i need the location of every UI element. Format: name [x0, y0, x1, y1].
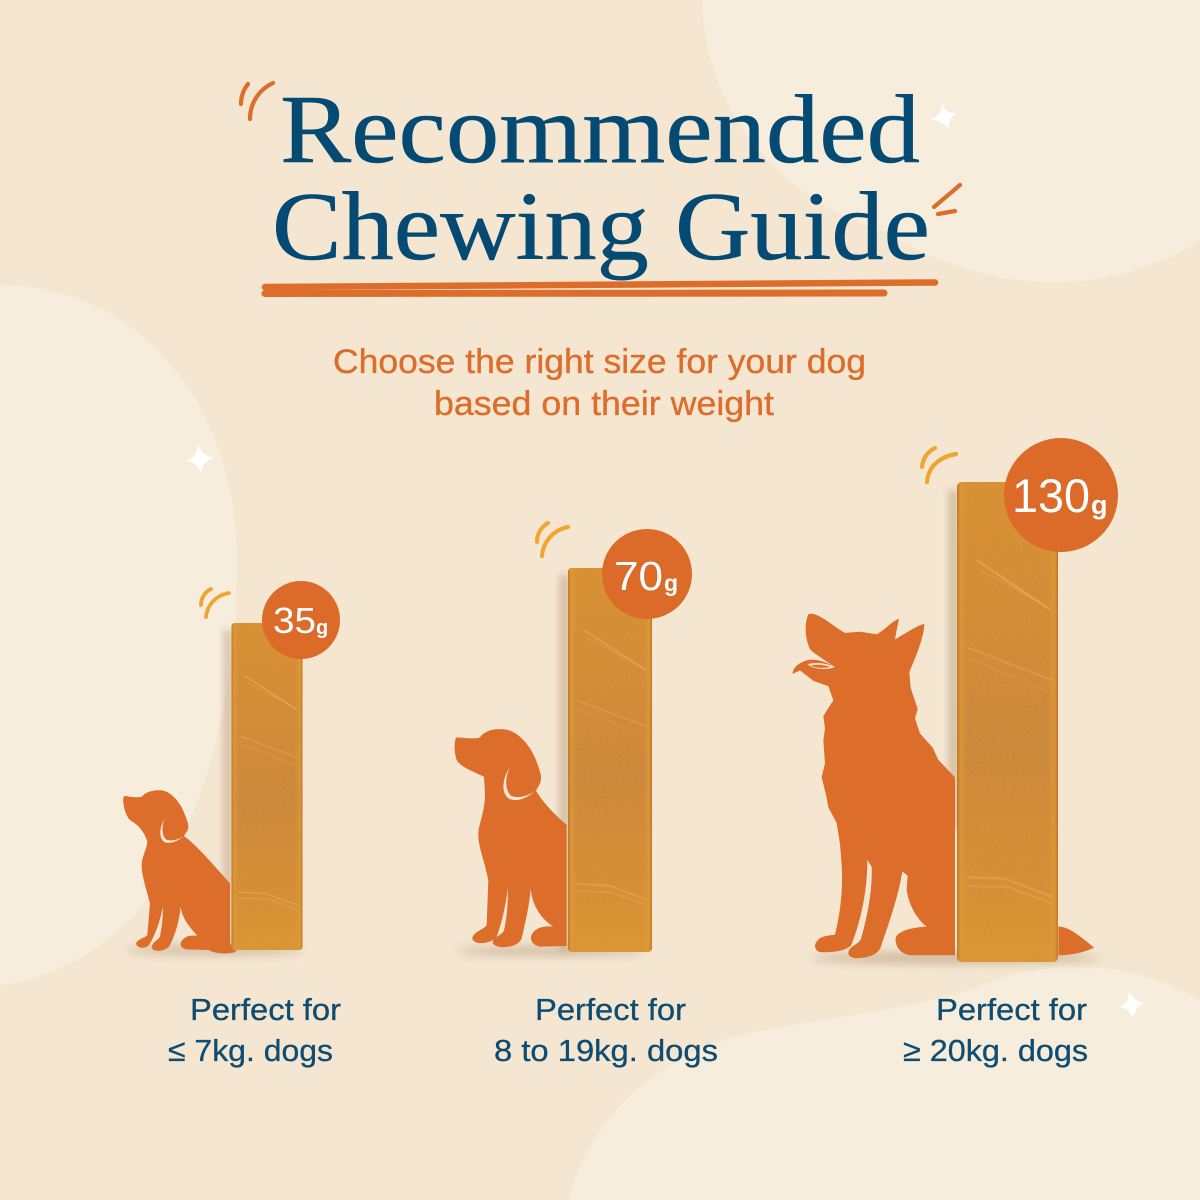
title — [272, 76, 930, 280]
weight badge 35g — [262, 581, 340, 659]
caption: small dog: ≤ 7kg. dogs — [168, 1033, 333, 1068]
weight badge 130g — [1004, 438, 1118, 552]
accent marks: title top left — [241, 83, 273, 119]
small dog silhouette — [123, 790, 237, 953]
ground shadow — [125, 946, 305, 954]
bar side shadow — [949, 490, 958, 830]
chew bar 70g — [568, 568, 652, 952]
title line 1: Recommended — [280, 76, 920, 183]
weight badge 35g: 35 — [273, 600, 316, 641]
sparkle: left — [186, 444, 214, 474]
ground shadow — [455, 947, 645, 955]
caption: large dog — [903, 992, 1088, 1068]
large dog silhouette — [793, 614, 1094, 958]
accent marks — [201, 589, 229, 617]
bar side shadow — [224, 630, 232, 948]
caption: small dog — [168, 992, 341, 1068]
chew bar 130g — [957, 482, 1058, 962]
title underline — [265, 282, 935, 294]
title line 2: Chewing Guide — [272, 173, 930, 280]
caption: medium dog: Perfect for — [535, 992, 686, 1027]
ground shadow — [810, 953, 1100, 963]
caption: small dog: Perfect for — [190, 992, 341, 1027]
background blob: bottom right — [568, 967, 1200, 1200]
caption: large dog: ≥ 20kg. dogs — [903, 1033, 1088, 1068]
accent marks — [537, 523, 568, 556]
caption: medium dog — [494, 992, 718, 1068]
weight badge 70g: 70 — [614, 553, 663, 599]
weight badge 70g — [602, 529, 692, 619]
sparkle: top right — [931, 103, 957, 131]
subtitle line 1: Choose the right size for your dog — [333, 343, 866, 381]
weight badge 130g: g — [1091, 490, 1108, 520]
chew bar 35g — [232, 623, 303, 950]
tail — [1058, 927, 1094, 955]
subtitle line 2: based on their weight — [434, 385, 775, 423]
medium dog silhouette — [455, 729, 567, 947]
weight badge 70g: g — [664, 570, 678, 596]
caption: medium dog: 8 to 19kg. dogs — [494, 1033, 718, 1068]
bar side shadow — [560, 575, 569, 950]
accent marks: title right — [934, 185, 960, 214]
background blob: top right — [702, 0, 1200, 282]
weight badge 130g: 130 — [1012, 469, 1090, 522]
weight badge 35g: g — [316, 617, 328, 639]
accent marks — [922, 448, 956, 482]
sparkle: bottom right — [1119, 991, 1145, 1019]
group: medium dog, 70g chew — [455, 523, 692, 955]
caption: large dog: Perfect for — [936, 992, 1087, 1027]
group: large dog, 130g chew — [793, 438, 1118, 963]
subtitle — [333, 343, 866, 423]
background blob: left — [0, 285, 237, 985]
group: small dog, 35g chew — [123, 581, 340, 954]
